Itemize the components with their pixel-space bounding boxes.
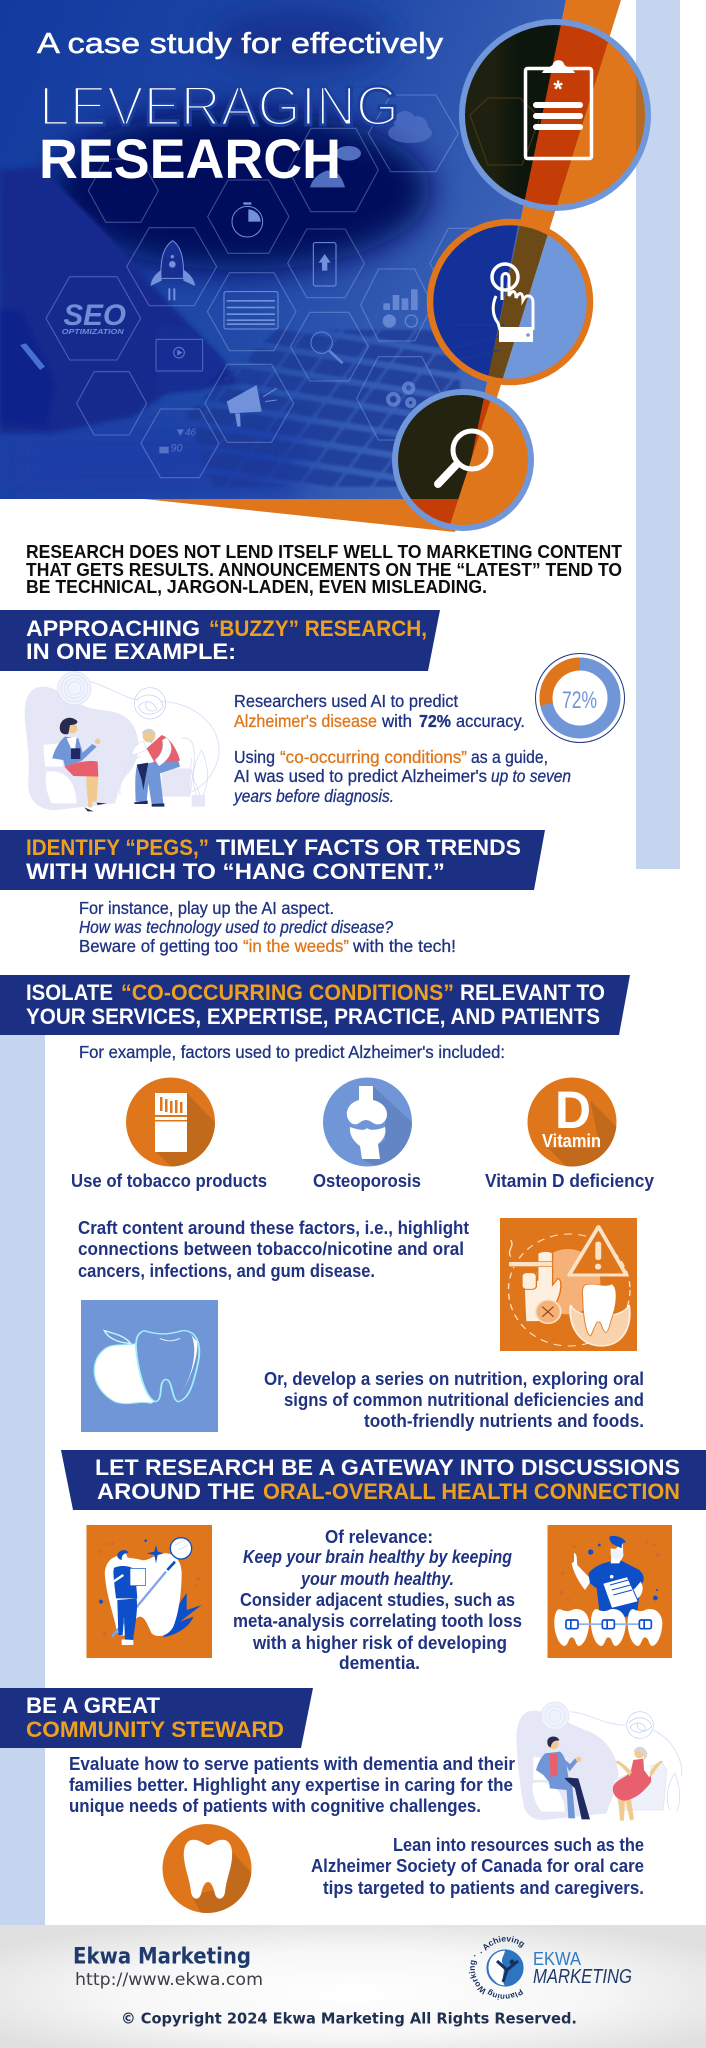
text: nutrition series: Or, develop a series on nutrition, exploring oral [264, 1368, 644, 1389]
text: AI prediction summary: years before diagnosis. [233, 786, 394, 806]
icon circle: tapping hand [426, 218, 594, 386]
banner: identify pegs: WITH WHICH TO “HANG CONTENT.” [26, 859, 445, 884]
icon: video player [156, 339, 203, 371]
factor: vitamin D [485, 1078, 655, 1191]
icon: SEO optimization: SEO [63, 299, 126, 332]
factor: tobacco [71, 1078, 267, 1191]
factor: osteoporosis [313, 1078, 421, 1191]
heading line: leveraging: LEVERAGING [39, 74, 399, 137]
text: nutrition series: signs of common nutritional deficiencies and [284, 1389, 644, 1410]
logo: Ekwa Marketing: · Achieving [480, 1936, 524, 1954]
footer url: http://www.ekwa.com [75, 1970, 263, 1990]
icon: rocket [151, 241, 195, 300]
banner: community steward: COMMUNITY STEWARD [26, 1717, 284, 1742]
text: AI prediction summary [233, 691, 571, 806]
right decorative column [636, 0, 680, 869]
footer [0, 1925, 706, 2048]
text: craft content: Craft content around these factors, i.e., highlight [78, 1217, 469, 1238]
icon: vitamin D: Vitamin [542, 1131, 601, 1151]
text: AI prediction summary: Alzheimer's disease [234, 711, 377, 731]
factor: vitamin D: Vitamin D deficiency [485, 1170, 655, 1191]
banner: isolate co-occurring conditions: “CO-OCCURRING CONDITIONS” [121, 980, 454, 1005]
text: pegs example: For instance, play up the AI aspect. [79, 898, 334, 918]
text: evaluate how to serve: Evaluate how to serve patients with dementia and their [69, 1754, 515, 1774]
intro statement: THAT GETS RESULTS. ANNOUNCEMENTS ON THE “LATEST” TEND TO [26, 560, 622, 580]
banner: community steward [0, 1688, 313, 1748]
factor: osteoporosis: Osteoporosis [313, 1170, 421, 1191]
text: lean into resources: Lean into resources such as the [393, 1835, 644, 1855]
title [37, 28, 444, 190]
text: nutrition series: tooth-friendly nutrients and foods. [364, 1410, 644, 1431]
text: of relevance: Keep your brain healthy by keeping [243, 1547, 512, 1567]
banner: identify pegs: IDENTIFY “PEGS,” [26, 835, 209, 860]
icon circle: clipboard: * [553, 76, 563, 103]
text: AI prediction summary: Researchers used AI to predict [234, 691, 458, 711]
icon circle: clipboard [459, 19, 651, 211]
banner: research as gateway: ORAL-OVERALL HEALTH CONNECTION [263, 1479, 680, 1504]
icon: SEO optimization: OPTIMIZATION [62, 327, 124, 336]
text: pegs example: How was technology used to predict disease? [79, 917, 393, 937]
text: AI prediction summary: “co-occurring conditions” [280, 747, 467, 767]
icon: phone [313, 243, 336, 286]
text: of relevance: with a higher risk of developing [252, 1633, 507, 1653]
donut chart: 72%: 72% [562, 687, 597, 714]
text: pegs example: Beware of getting too [79, 936, 238, 956]
left decorative column [0, 1035, 45, 1925]
banner: isolate co-occurring conditions: RELEVANT TO [460, 980, 605, 1005]
text: of relevance: your mouth healthy. [300, 1569, 454, 1589]
text: of relevance: meta-analysis correlating tooth loss [233, 1611, 522, 1631]
icon: tooth circle [162, 1824, 252, 1913]
icon: knee joint [323, 1078, 415, 1170]
icon: vitamin D: D [555, 1081, 591, 1140]
text: pegs example [79, 898, 456, 956]
text: lean into resources: Alzheimer Society of Canada for oral care [311, 1856, 644, 1876]
banner: isolate co-occurring conditions: YOUR SERVICES, EXPERTISE, PRACTICE, AND PATIENTS [26, 1004, 600, 1029]
image: dentist with braces [548, 1525, 672, 1658]
icon circle: magnifying glass [392, 389, 534, 531]
text: pegs example: with the tech! [352, 936, 456, 956]
text: of relevance: dementia. [339, 1653, 420, 1673]
copyright: © Copyright 2024 Ekwa Marketing All Rights Reserved. [121, 2010, 577, 2028]
text: of relevance [233, 1527, 522, 1673]
icon: megaphone [227, 385, 277, 427]
factor: tobacco: Use of tobacco products [71, 1170, 267, 1191]
banner: identify pegs: TIMELY FACTS OR TRENDS [216, 835, 521, 860]
donut chart: 72% [536, 654, 624, 742]
footer company name: Ekwa Marketing [73, 1944, 251, 1970]
logo: Ekwa Marketing: Working · [468, 1954, 486, 1995]
text: evaluate how to serve: unique needs of patients with cognitive challenges. [69, 1796, 481, 1816]
banner: approaching buzzy research [0, 610, 440, 671]
banner: research as gateway [61, 1450, 706, 1510]
image: apple and tooth [81, 1300, 218, 1432]
text: of relevance: Of relevance: [325, 1527, 433, 1547]
intro statement: BE TECHNICAL, JARGON-LADEN, EVEN MISLEADING. [26, 577, 487, 597]
text: AI prediction summary: 72% [419, 711, 451, 731]
text: lean into resources: tips targeted to patients and caregivers. [323, 1878, 644, 1898]
text: lean into resources [311, 1835, 644, 1898]
text: AI prediction summary: as a guide, [471, 747, 548, 767]
icon: likes counter: 90 [171, 443, 183, 455]
text: AI prediction summary: Using [234, 747, 275, 767]
banner: isolate co-occurring conditions [0, 975, 630, 1035]
icon: bar chart [383, 289, 418, 328]
banner: approaching buzzy research: IN ONE EXAMPLE: [26, 639, 236, 664]
icon: browser window [224, 292, 278, 329]
icon: likes counter [159, 427, 197, 455]
icon: vitamin D [528, 1078, 616, 1166]
logo: Ekwa Marketing [468, 1936, 632, 2000]
banner: approaching buzzy research: “BUZZY” RESEARCH, [209, 616, 427, 641]
logo: Ekwa Marketing: Planning [487, 1989, 524, 2000]
icon: gears [388, 383, 414, 406]
icon: likes counter: 46 [185, 427, 197, 438]
intro statement: RESEARCH DOES NOT LEND ITSELF WELL TO MARKETING CONTENT [26, 542, 622, 562]
heading line: research: RESEARCH [39, 127, 341, 190]
orange diagonal strip [144, 0, 621, 532]
banner: research as gateway: LET RESEARCH BE A GATEWAY INTO DISCUSSIONS [95, 1455, 680, 1480]
text: AI prediction summary: with [381, 711, 412, 731]
banner: identify pegs [0, 830, 545, 890]
icon: cloud [388, 111, 432, 143]
text: craft content [78, 1217, 469, 1281]
banner: community steward: BE A GREAT [26, 1693, 161, 1718]
banner: research as gateway: AROUND THE [97, 1479, 255, 1504]
text: evaluate how to serve [69, 1754, 515, 1816]
hero photo panel [0, 0, 600, 500]
text: factors intro: For example, factors used to predict Alzheimer's included: [79, 1042, 505, 1062]
banner: isolate co-occurring conditions: ISOLATE [26, 980, 113, 1005]
subtitle: A case study for effectively [37, 28, 444, 60]
text: AI prediction summary: AI was used to predict Alzheimer's [234, 766, 487, 786]
intro statement [26, 542, 622, 597]
text: AI prediction summary: accuracy. [456, 711, 525, 731]
icon: cigarette pack [126, 1078, 215, 1166]
logo: Ekwa Marketing: EKWA [533, 1948, 582, 1969]
text: nutrition series [264, 1368, 644, 1431]
logo: Ekwa Marketing: MARKETING [533, 1966, 632, 1988]
text: evaluate how to serve: families better. Highlight any expertise in caring for the [69, 1775, 513, 1795]
text: of relevance: Consider adjacent studies, such as [240, 1590, 515, 1610]
icon: stopwatch [232, 202, 263, 237]
image: smoking and tooth warning [500, 1218, 637, 1351]
banner: approaching buzzy research: APPROACHING [26, 616, 200, 641]
hexagon grid [46, 95, 503, 478]
illustration: therapist and elderly patient [25, 672, 219, 811]
illustration: doctor and elderly woman [516, 1702, 682, 1821]
icon: magnifier [311, 332, 343, 363]
text: AI prediction summary: up to seven [491, 766, 571, 786]
image: dentist with giant tooth [86, 1525, 212, 1658]
text: pegs example: “in the weeds” [243, 936, 349, 956]
text: craft content: connections between tobacco/nicotine and oral [78, 1238, 464, 1259]
icon: person [310, 146, 361, 187]
text: craft content: cancers, infections, and gum disease. [78, 1260, 375, 1281]
